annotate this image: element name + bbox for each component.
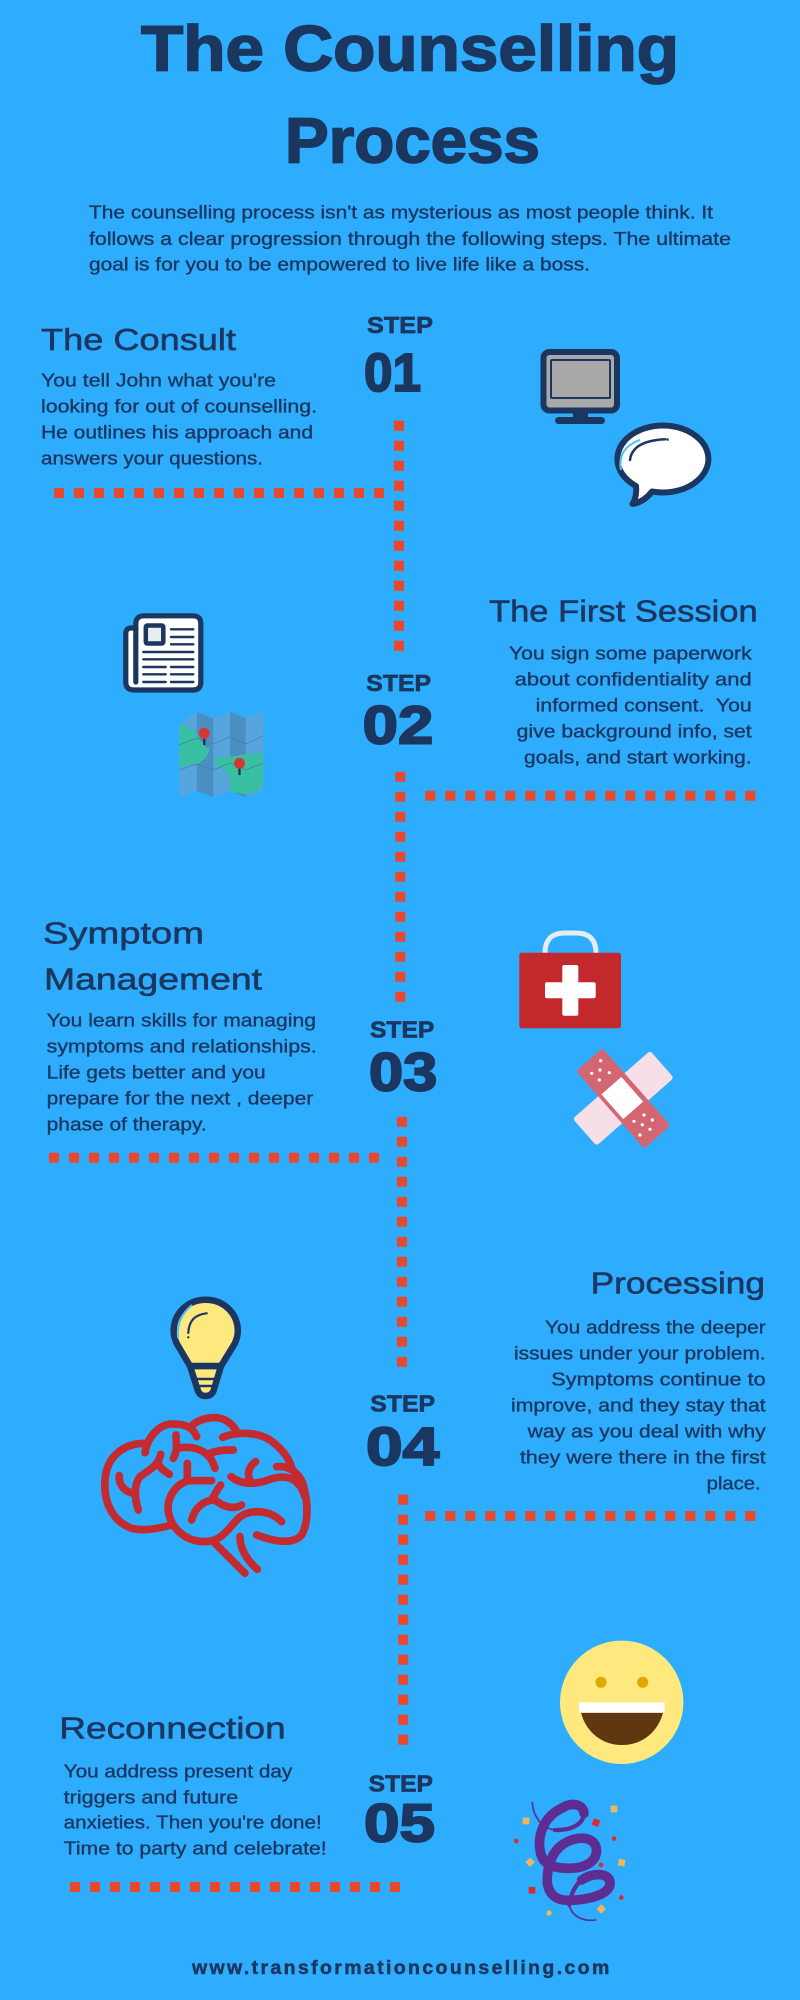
title: The Counselling [141, 13, 679, 85]
icon: light bulb [174, 1300, 238, 1396]
intro text [89, 201, 731, 275]
step 4 label: STEP [370, 1390, 435, 1416]
panel: the first session: goals, and start working. [524, 746, 752, 767]
panel: the consult: He outlines his approach and [41, 422, 313, 443]
panel: symptom management: Symptom [43, 916, 204, 950]
step 4 label [366, 1390, 439, 1477]
step 3 label: 03 [369, 1043, 437, 1103]
icon: brain [105, 1418, 307, 1573]
panel: processing [511, 1266, 767, 1493]
panel: the first session: You sign some paperwork [509, 642, 753, 663]
panel: the consult: You tell John what you're [41, 370, 276, 391]
step 5 label [364, 1771, 435, 1853]
step 2 label: STEP [366, 670, 431, 696]
panel: the first session [489, 595, 758, 767]
panel: symptom management: You learn skills for managing [47, 1010, 316, 1031]
panel: symptom management: symptoms and relationships. [47, 1036, 317, 1057]
panel: symptom management [43, 916, 317, 1135]
icon: speech bubble [617, 425, 708, 504]
panel: processing: place. [707, 1472, 761, 1493]
step 3 label: STEP [370, 1017, 434, 1043]
panel: reconnection: You address present day [64, 1760, 293, 1781]
panel: symptom management: Management [44, 962, 263, 996]
intro text: The counselling process isn't as mysterious as most people think. It [89, 201, 713, 222]
step 2 label: 02 [363, 695, 433, 755]
step 3 label [369, 1017, 437, 1103]
panel: the consult: The Consult [41, 323, 237, 357]
timeline: dotted connectors [49, 421, 755, 1887]
panel: the first session: give background info, set [517, 720, 752, 741]
icon: newspaper [126, 616, 201, 690]
footer website: www.transformationcounselling.com [191, 1957, 609, 1979]
step 5 label: 05 [364, 1793, 435, 1853]
panel: symptom management: phase of therapy. [47, 1114, 207, 1135]
panel: the first session: about confidentiality and [515, 668, 752, 689]
panel: processing: Symptoms continue to [551, 1368, 766, 1389]
icon: first aid kit [519, 933, 621, 1028]
panel: the first session: informed consent. You [536, 694, 752, 715]
icon: smiley face [560, 1641, 683, 1764]
intro text: goal is for you to be empowered to live life like a boss. [89, 254, 590, 275]
step 1 label: STEP [367, 312, 433, 338]
panel: processing: way as you deal with why [527, 1420, 767, 1441]
panel: the consult: looking for out of counselling. [41, 396, 317, 417]
step 4 label: 04 [366, 1417, 439, 1477]
panel: processing: Processing [591, 1266, 765, 1300]
panel: symptom management: Life gets better and you [47, 1062, 266, 1083]
panel: reconnection: Time to party and celebrate! [64, 1838, 327, 1859]
panel: reconnection: triggers and future [64, 1786, 238, 1807]
panel: processing: improve, and they stay that [511, 1394, 766, 1415]
intro text: follows a clear progression through the following steps. The ultimate [89, 228, 731, 249]
step 2 label [363, 670, 433, 755]
step 1 label [364, 312, 433, 403]
step 5 label: STEP [369, 1771, 433, 1797]
panel: the consult [41, 323, 317, 469]
icon: crossed bandages [573, 1048, 674, 1149]
step 1 label: 01 [364, 343, 421, 403]
icon: confetti streamer [514, 1803, 626, 1920]
icon: computer monitor [544, 352, 617, 424]
icon: folded map with pins [179, 712, 263, 797]
panel: symptom management: prepare for the next , deeper [47, 1088, 313, 1109]
title: Process [285, 105, 540, 177]
panel: the first session: The First Session [489, 595, 758, 629]
title [141, 13, 679, 177]
panel: reconnection: Reconnection [59, 1711, 286, 1745]
panel: processing: issues under your problem. [514, 1342, 766, 1363]
panel: processing: You address the deeper [545, 1316, 766, 1337]
panel: the consult: answers your questions. [41, 448, 263, 469]
panel: reconnection [59, 1711, 327, 1859]
panel: processing: they were there in the first [520, 1446, 766, 1467]
panel: reconnection: anxieties. Then you're done! [64, 1812, 322, 1833]
